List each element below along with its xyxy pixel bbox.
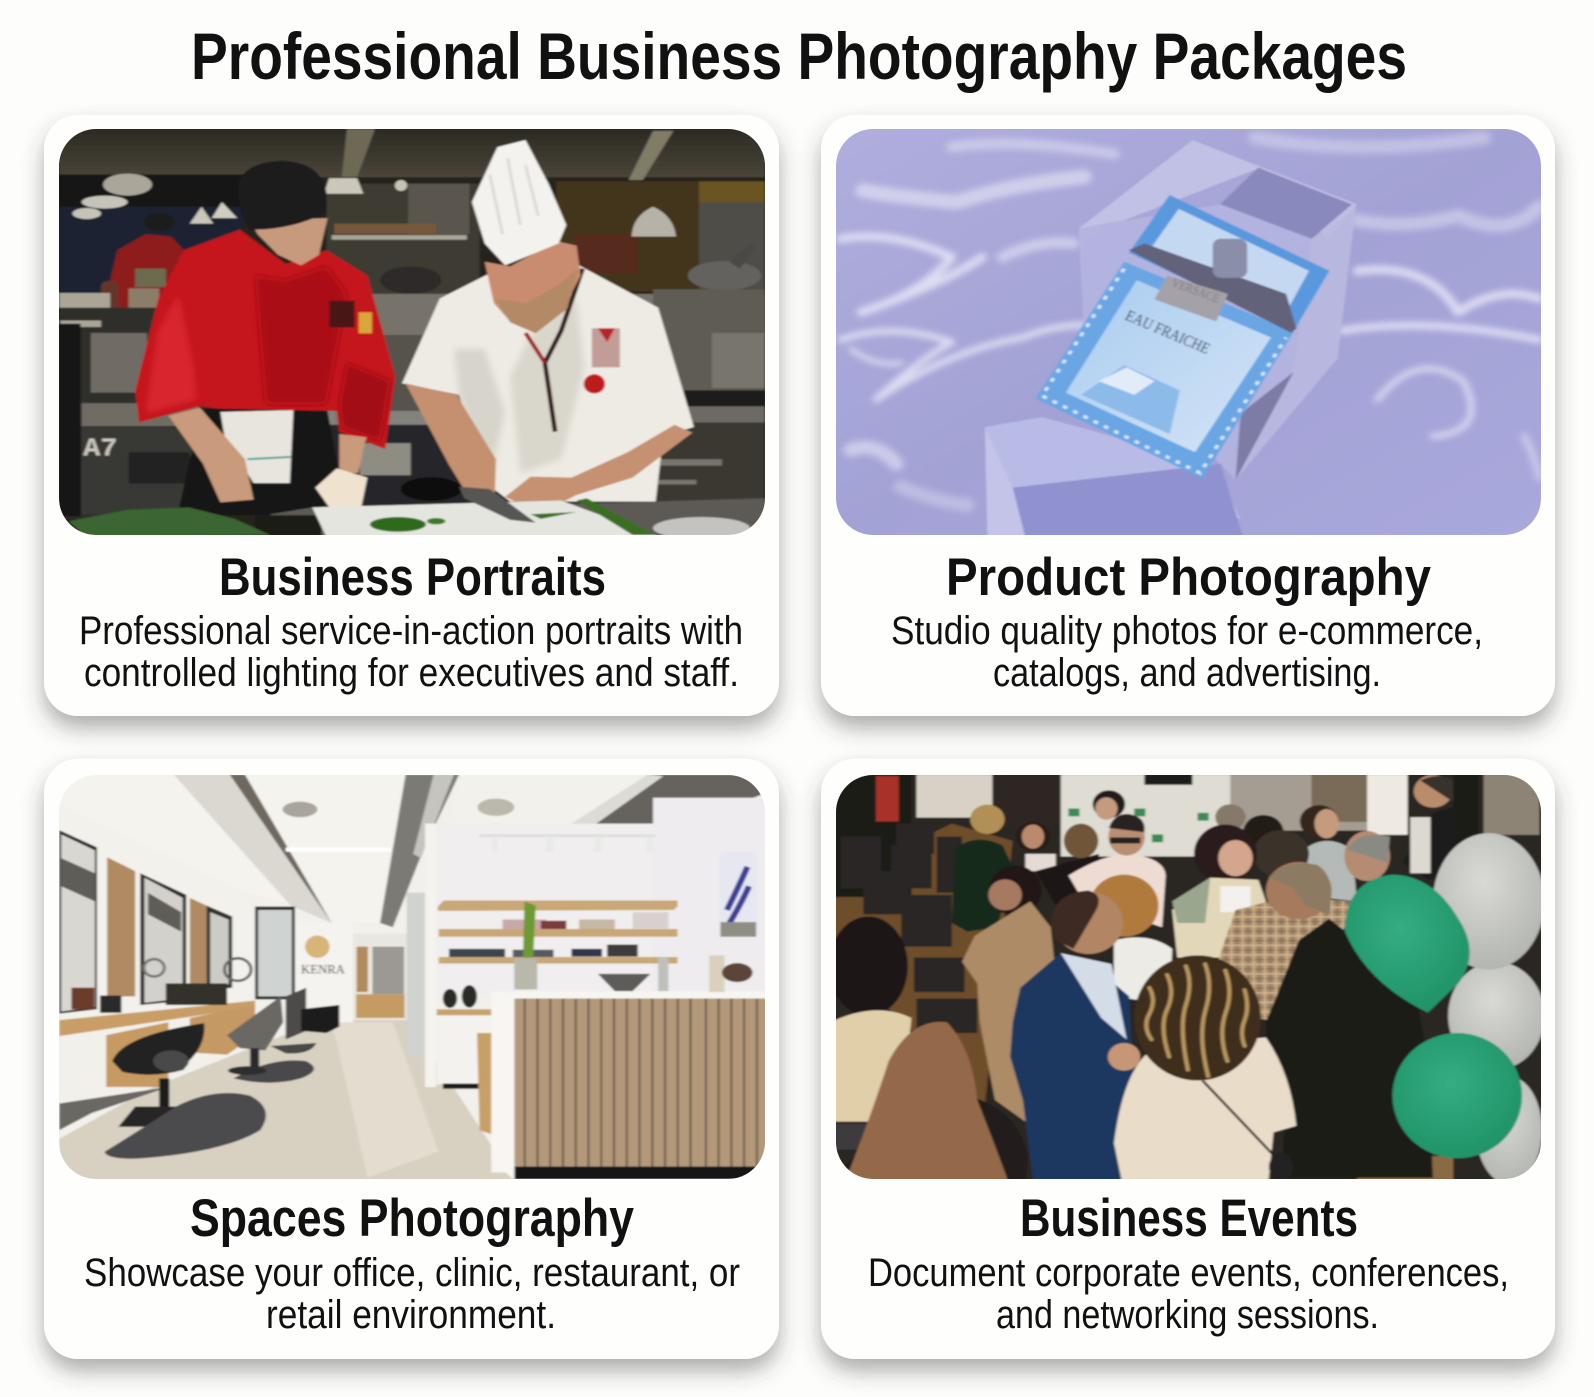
reception desk (491, 991, 767, 1173)
description (79, 609, 743, 695)
floor (59, 1018, 515, 1182)
photo: perfume bottle (825, 124, 1549, 542)
white chef head and toque (483, 241, 582, 318)
long-haired woman seated (838, 1096, 1028, 1180)
panel: business events (821, 759, 1555, 1359)
label: A7: A7 (83, 435, 117, 464)
description: and networking sessions. (996, 1293, 1379, 1337)
description: retail environment. (266, 1293, 556, 1337)
red chef jacket (135, 230, 395, 449)
description: Showcase your office, clinic, restaurant, or (84, 1251, 740, 1295)
perfume bottle (1035, 195, 1329, 478)
description (84, 1251, 740, 1337)
silk waves (841, 138, 1539, 505)
pedestal block (985, 417, 1243, 537)
label: VERSACE: VERSACE (1170, 275, 1222, 305)
photo: chefs in a kitchen (51, 124, 776, 542)
man in plaid jacket (1218, 897, 1352, 1022)
woman with curly hair and beige jacket (1114, 1037, 1296, 1182)
left wall and stations (59, 804, 352, 1022)
jewelry and lower cabinet (443, 989, 457, 1008)
red chef arms and face (168, 408, 254, 502)
heading: Business Portraits (219, 548, 606, 607)
description: Professional service-in-action portraits with (79, 609, 743, 653)
man in black jacket (1266, 919, 1433, 1178)
description (891, 609, 1483, 695)
woman with glasses in tan coat (989, 866, 1042, 916)
photo: salon interior (51, 767, 776, 1186)
description (868, 1251, 1509, 1337)
photo: networking event (825, 767, 1549, 1186)
panel: business portraits (44, 115, 779, 716)
white chef arms (406, 383, 496, 500)
bamboo plant (523, 901, 536, 957)
description: controlled lighting for executives and staff. (84, 651, 739, 695)
glass cube (1079, 140, 1357, 480)
label: EAU FRAICHE: EAU FRAICHE (1122, 306, 1213, 358)
dark hair woman at left (829, 916, 908, 1016)
description: Document corporate events, conferences, (868, 1251, 1509, 1295)
standing guests in background (952, 840, 1013, 932)
red chef apron and towel (178, 409, 338, 515)
barber pole (719, 852, 758, 936)
woman in patchwork jacket (1194, 824, 1257, 883)
curly red-haired guest (1090, 875, 1159, 937)
counter, board, herbs and knife (270, 498, 765, 537)
white chef jacket (402, 264, 694, 501)
KENRA sign wall (296, 923, 353, 1022)
balloons (1448, 962, 1544, 1070)
man in navy suit (1010, 953, 1134, 1180)
vanity counter (59, 1001, 255, 1036)
salon chairs (112, 1023, 204, 1075)
heading: Product Photography (946, 548, 1431, 607)
central wall and shelves (425, 824, 764, 996)
description: Studio quality photos for e-commerce, (891, 609, 1483, 653)
rows of chairs (841, 824, 977, 1033)
heading: Spaces Photography (190, 1189, 634, 1248)
description: catalogs, and advertising. (993, 651, 1381, 695)
label: KENRA: KENRA (301, 963, 346, 977)
panel: spaces photography (44, 759, 779, 1359)
heading: Business Events (1020, 1189, 1358, 1248)
panel: product photography (821, 115, 1555, 716)
ceiling (59, 774, 291, 906)
